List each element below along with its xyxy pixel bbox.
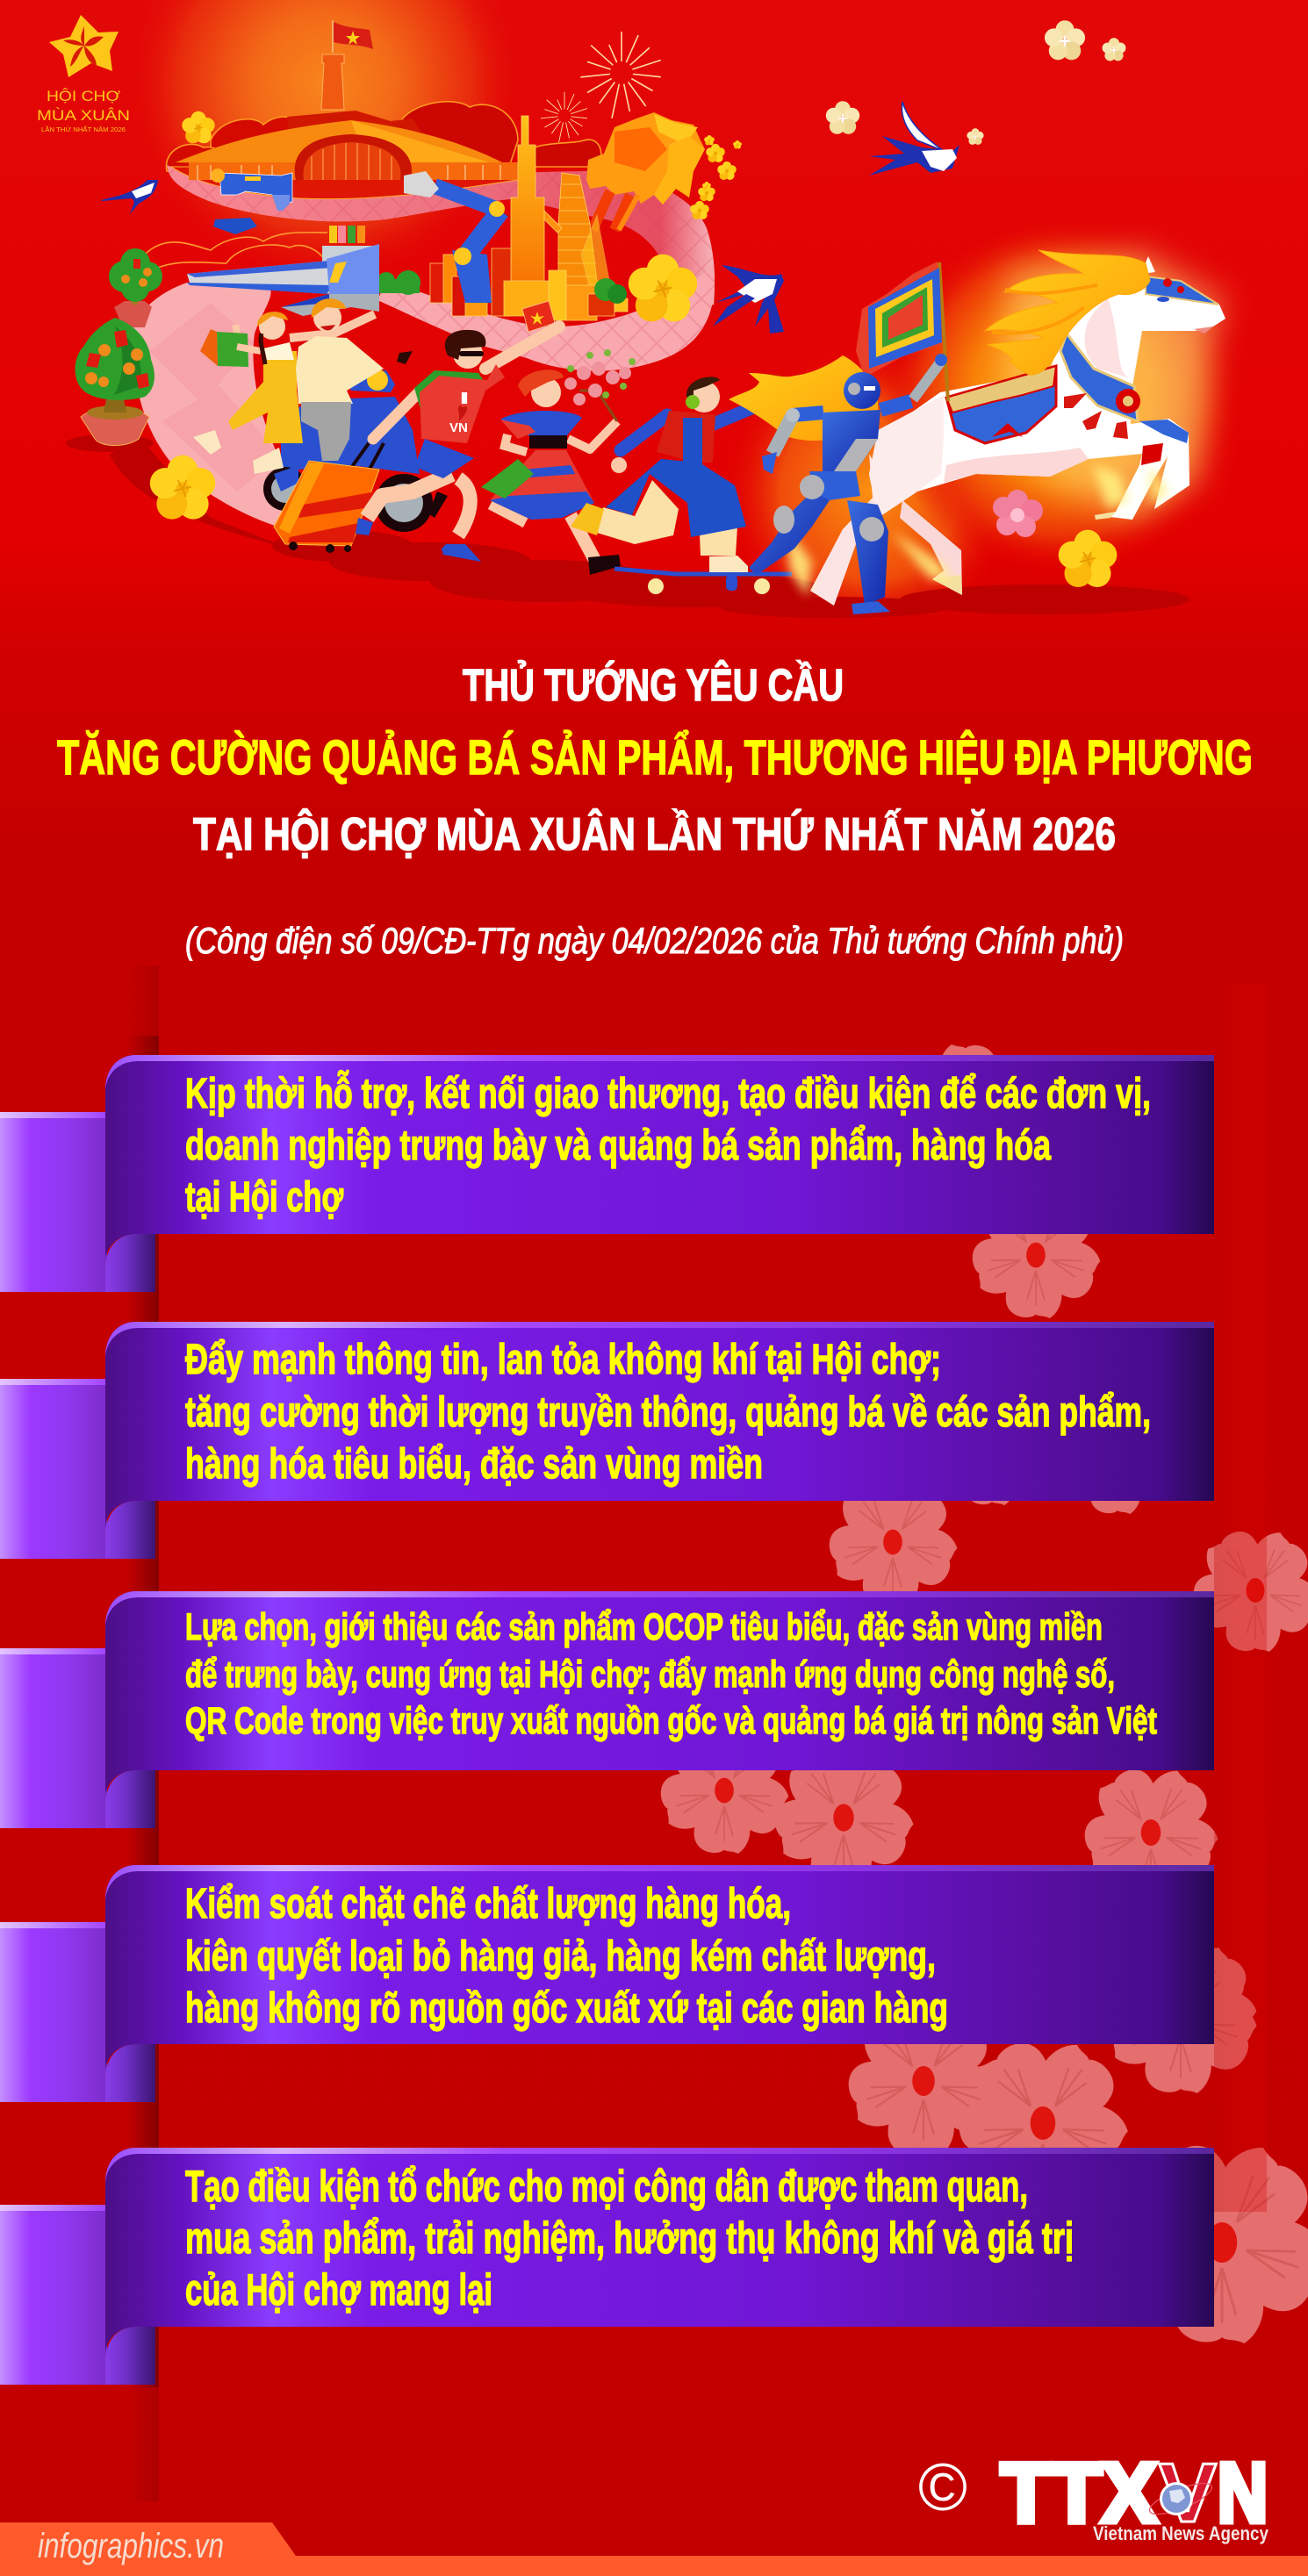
robot with flag [749,262,948,614]
panel: ribbon 3 [0,1591,1214,1828]
pink and yellow flowers at right [993,490,1117,587]
large kumquat tree [75,318,155,446]
hall red floor [171,167,518,199]
boy in VN shirt [356,326,559,562]
small kumquat tree [109,248,162,327]
robotic arm [404,171,505,303]
collar [1060,334,1138,421]
TTXVN logo: V [1159,2446,1217,2540]
logo: Hội chợ Mùa Xuân: MÙA XUÂN [37,107,130,124]
panel: ribbon 5 [0,2148,1214,2385]
mane [985,250,1150,375]
ground shadows [66,434,1189,618]
panel: ribbon 4: kiên quyết loại bỏ hàng giả, hàng kém chất lượng, [185,1934,936,1980]
yellow flower on ribbon [629,255,697,321]
hoof fire [786,465,1168,597]
body [869,281,1225,520]
apricot blossoms [690,135,742,219]
hero illustration [75,20,1225,614]
sewing machine [211,169,292,234]
couple on scooter [193,298,433,532]
fireworks [541,32,661,142]
yellow flower lower left [150,456,215,520]
copyright symbol: © [918,2450,967,2525]
hall [176,111,518,180]
panel: ribbon 2 [0,1322,1214,1559]
yellow flower near hall [182,111,215,143]
panel: ribbon 1: tại Hội chợ [185,1174,344,1221]
lower cloud outlines [145,233,327,268]
TTXVN logo: N [1218,2446,1268,2540]
logo: Hội chợ Mùa Xuân [37,15,130,133]
panel: ribbon 4: Kiểm soát chặt chẽ chất lượng hàng hóa, [185,1881,791,1927]
panel: ribbon 2: hàng hóa tiêu biểu, đặc sản vùng miền [185,1441,763,1488]
panel: ribbon 2: Đẩy mạnh thông tin, lan tỏa không khí tại Hội chợ; [185,1337,941,1383]
swallows [101,102,959,334]
boy in VN shirt: VN [449,420,468,435]
clouds behind hall [166,102,601,171]
panel: ribbon 4: hàng không rõ nguồn gốc xuất xứ tại các gian hàng [185,1985,948,2032]
blue gantry machine [187,226,379,316]
cream blossoms and small flowers [826,20,1125,145]
boy in VN shirt: I [459,390,470,407]
subtitle: (Công điện số 09/CĐ-TTg ngày 04/02/2026 của Thủ tướng Chính phủ) [185,920,1124,961]
TTXVN logo: TTX [1001,2446,1157,2540]
man in ao dai on skateboard [571,373,792,594]
pink ribbon: upper band [167,165,715,305]
panel: ribbon 5: của Hội chợ mang lại [185,2265,492,2314]
woman [233,325,237,347]
logo: Hội chợ Mùa Xuân: LẦN THỨ NHẤT NĂM 2026 [41,125,126,133]
pink ribbon: lower band and left lobe [132,263,715,531]
background glows [105,0,1308,614]
bridle [1146,276,1218,305]
horse [810,250,1225,606]
suitcase [274,443,384,553]
small vietnamese flag [522,301,555,332]
ethnic girl [481,370,621,575]
TTXVN logo [1001,2446,1269,2544]
dragon [586,112,705,230]
horse tail flames [729,355,878,441]
title: THỦ TƯỚNG YÊU CẦU [463,659,844,710]
title [57,659,1253,860]
scooter [281,397,420,474]
flag tower [321,20,373,110]
knee bands [1139,420,1189,443]
city towers [430,116,628,320]
TTXVN logo: Vietnam News Agency [1093,2522,1269,2544]
green trees behind city [377,270,627,304]
panel: ribbon 4 [0,1865,1214,2102]
saddle [946,366,1056,443]
footer bar: infographics.vn [38,2527,224,2565]
panel: ribbon 1 [0,1055,1214,1292]
column shadows [127,965,1267,2501]
logo: Hội chợ Mùa Xuân: HỘI CHỢ [47,88,120,104]
peach blossom branch [564,349,636,421]
rear legs [810,454,895,606]
background flowers [655,1044,1308,2343]
title: TẠI HỘI CHỢ MÙA XUÂN LẦN THỨ NHẤT NĂM 2026 [193,808,1116,860]
man [290,314,375,338]
footer bar [0,2522,1308,2576]
